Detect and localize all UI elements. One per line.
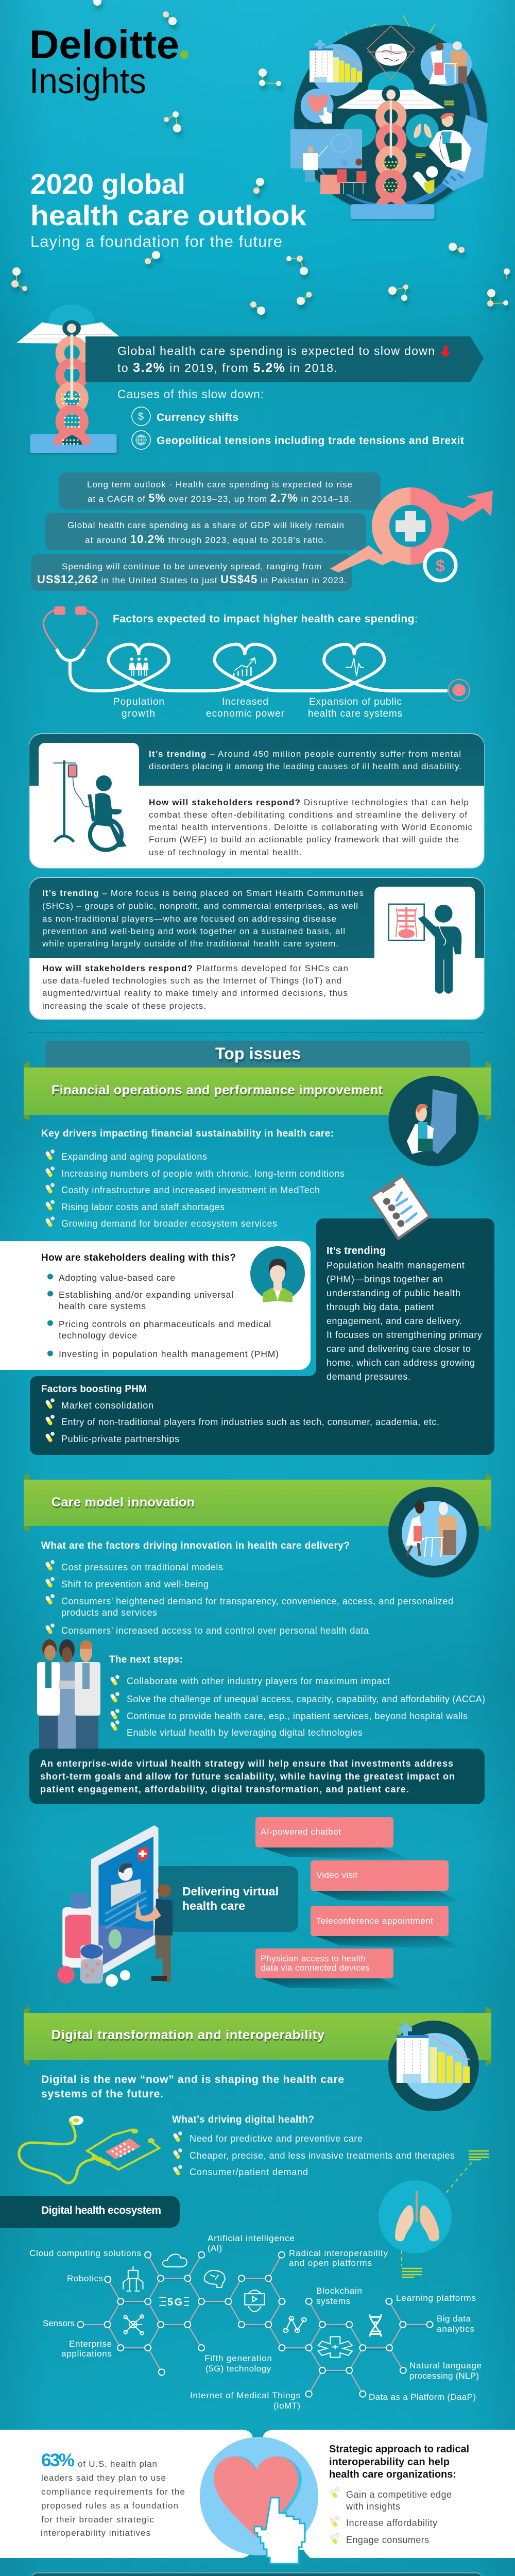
icon: pulse: [346, 658, 364, 676]
list: key drivers: Growing demand for broader ecosystem services: [61, 1218, 277, 1229]
outlook box 3: US$12,262 in the United States to just US$45 in Pakistan in 2023.: [37, 573, 347, 586]
outlook box 2: at around 10.2% through 2023, equal to 2018's ratio.: [85, 533, 326, 546]
outlook box 3: Spending will continue to be unevenly spread, ranging from: [62, 562, 321, 571]
icon: heart with pointer hand: [200, 2437, 318, 2564]
list: factors driving innovation: Consumers’ increased access to and control over personal health data: [61, 1625, 369, 1636]
network diagram: digital health ecosystem: Natural language: [409, 2361, 482, 2370]
logo: Deloitte Insights: [29, 22, 188, 101]
label: digital health ecosystem: Digital health ecosystem: [41, 2205, 161, 2216]
list: strategic approach: Engage consumers: [346, 2535, 429, 2545]
box: AI-powered chatbot: AI-powered chatbot: [261, 1827, 341, 1837]
callout: virtual health strategy: short-term goals and allow for future scalability, while having the greatest impact on: [40, 1771, 455, 1782]
network diagram: digital health ecosystem: Blockchain: [316, 2286, 362, 2296]
network diagram: digital health ecosystem: processing (NLP): [409, 2371, 479, 2381]
outlook box 2: Global health care spending as a share of GDP will likely remain: [67, 520, 344, 530]
panel: smart health communities trend: augmented/virtual reality to make timely and informed decisions, thus: [42, 988, 348, 998]
icon: caregiver with walker badge: [388, 1487, 479, 1578]
icon: medical star: [318, 2337, 352, 2358]
panel: mental health trend: mental health interventions. Deloitte is collaborating with World Economic: [149, 822, 473, 832]
icon: DNA: [370, 2314, 381, 2337]
text: PHM trending: engagement, and care delivery.: [327, 1316, 462, 1326]
icon: stakeholder avatar: [250, 1246, 305, 1302]
panel: smart health communities trend: (SHCs) – groups of public, nonprofit, and commercial enterprises, as well: [42, 901, 358, 911]
icon: wheelchair patient with IV: [53, 760, 127, 850]
stat: 63 percent: 63%: [41, 2450, 75, 2470]
logo: Deloitte Insights: Insights: [29, 61, 146, 101]
heading: digital is the new now: Digital is the new “now” and is shaping the health care: [41, 2074, 344, 2086]
factor labels: Increased: [222, 697, 268, 707]
panel: mental health trend: [29, 734, 484, 868]
list: strategic approach: interoperability can help: [329, 2456, 450, 2468]
ribbon: financial operations: Financial operations and performance improvement: [52, 1083, 383, 1097]
illustration: pills: [57, 1959, 167, 1987]
text: PHM trending: understanding of public health: [327, 1288, 460, 1298]
panel: PHM dark backdrop: [30, 1218, 494, 1455]
icon: clipboard: [371, 1176, 430, 1239]
panel: smart health communities trend: while operating largely outside of the traditional health care system.: [42, 939, 338, 948]
box: AI-powered chatbot: [255, 1817, 412, 1860]
network diagram: digital health ecosystem: Data as a Platform (DaaP): [369, 2392, 476, 2402]
network diagram: digital health ecosystem: systems: [316, 2296, 350, 2306]
icon: robot: [123, 2266, 143, 2291]
panel: smart health communities trend: It’s trending – More focus is being placed on Smart Health Communities: [42, 888, 364, 898]
list: what's driving digital health: [172, 2114, 455, 2177]
ribbon: digital transformation: [24, 2006, 491, 2066]
panel: smart health communities trend: increasing the scale of these projects.: [42, 1001, 206, 1011]
box: physician access: Physician access to health: [261, 1954, 366, 1963]
factors heading: Factors expected to impact higher health care spending:: [113, 613, 418, 625]
presentation board: [290, 129, 366, 194]
panel: mental health trend: combat these often-debilitating conditions and streamline the delivery of: [149, 810, 467, 820]
outlook box 3: [31, 554, 352, 591]
icon: brain: [204, 2270, 225, 2287]
wings: [337, 86, 445, 110]
illustration: three doctors: [37, 1639, 103, 1754]
list: factors boosting PHM: Market consolidation: [61, 1400, 153, 1411]
list: key drivers: [45, 1149, 345, 1229]
box: physician access: data via connected devices: [261, 1963, 370, 1973]
list: strategic approach: Increase affordability: [346, 2518, 437, 2528]
callout: virtual health strategy: An enterprise-wide virtual health strategy will help ensure that investments address: [40, 1758, 453, 1769]
stat: 63 percent: of U.S. health plan: [78, 2459, 157, 2469]
logo: Deloitte Insights: Deloitte: [29, 22, 179, 67]
network diagram: digital health ecosystem: Radical interoperability: [289, 2248, 388, 2258]
icon: rising cost symbol: $: [436, 556, 445, 575]
hero illustration: health care collage: [290, 25, 488, 219]
factor labels: health care systems: [308, 708, 402, 719]
stat: 63 percent: [41, 2450, 185, 2538]
outlook box 2: [45, 513, 366, 550]
stethoscope with heart loops: [43, 606, 470, 701]
list: strategic approach: health care organizations:: [329, 2469, 456, 2480]
panel: mental health trend: It’s trending – Around 450 million people currently suffer from mental: [149, 749, 461, 759]
cause: currency shifts: $: [138, 411, 144, 422]
heading: digital is the new now: [41, 2074, 344, 2100]
text: PHM trending: It focuses on strengthening primary: [327, 1330, 482, 1340]
list: strategic approach: Strategic approach to radical: [329, 2444, 469, 2455]
ribbon: digital transformation: Digital transformation and interoperability: [52, 2028, 324, 2042]
stat: 63 percent: proposed rules as a foundation: [41, 2501, 178, 2511]
panel: smart health communities trend: as non-traditional players—who are focused on addressing disease: [42, 914, 336, 924]
network diagram: digital health ecosystem: Enterprise: [69, 2339, 112, 2349]
factor labels: Expansion of public: [309, 697, 402, 707]
cause: currency shifts: Currency shifts: [157, 412, 238, 423]
icon: doctor with tablet badge: [388, 1076, 479, 1166]
text: PHM trending: care and delivering care closer to: [327, 1344, 471, 1354]
cause: geopolitical tensions: Geopolitical tensions including trade tensions and Brexit: [157, 435, 464, 447]
network diagram: digital health ecosystem: Cloud computing solutions: [29, 2248, 141, 2258]
panel: stakeholders: [0, 1241, 311, 1370]
panel: stakeholders: health care systems: [59, 1301, 146, 1311]
box: teleconference appointment: Teleconference appointment: [316, 1916, 433, 1926]
list: strategic approach: Gain a competitive edge: [346, 2489, 452, 2500]
network diagram: digital health ecosystem: Sensors: [43, 2318, 75, 2328]
text: PHM trending: through big data, patient: [327, 1302, 434, 1312]
factors driving innovation heading: What are the factors driving innovation in health care delivery?: [41, 1540, 350, 1551]
box: video visit: Video visit: [316, 1870, 357, 1880]
arrow banner: spending slowdown: to 3.2% in 2019, from 5.2% in 2018.: [117, 361, 337, 375]
list: next steps: [110, 1675, 485, 1738]
list: factors boosting PHM: Entry of non-traditional players from industries such as tech, consumer, academia, etc.: [61, 1417, 439, 1427]
list: key drivers: Expanding and aging populations: [61, 1151, 207, 1162]
list: factors boosting PHM: Public-private partnerships: [61, 1434, 179, 1444]
arrow banner: spending slowdown: [85, 336, 484, 382]
illustration: tablet with doctor: [62, 1825, 173, 1982]
hospital and bar chart: [310, 40, 363, 96]
network diagram: digital health ecosystem: Internet of Medical Things: [190, 2391, 300, 2400]
network diagram: digital health ecosystem: Robotics: [67, 2274, 103, 2283]
label: digital health ecosystem: [0, 2196, 180, 2228]
text: PHM trending: (PHM)—brings together an: [327, 1274, 443, 1284]
ribbon: care model innovation: Care model innovation: [52, 1495, 195, 1510]
text: PHM trending: demand pressures.: [327, 1371, 410, 1382]
network diagram: digital health ecosystem: Fifth generation: [204, 2353, 272, 2363]
key drivers heading: Key drivers impacting financial sustainability in health care:: [41, 1128, 334, 1139]
panel: mental health trend: disorders placing it among the leading causes of ill health and disability.: [149, 761, 461, 771]
list: factors driving innovation: products and services: [61, 1607, 157, 1618]
box: delivering virtual health care: health care: [182, 1899, 245, 1912]
list: what's driving digital health: Consumer/patient demand: [190, 2167, 308, 2177]
network diagram: digital health ecosystem: 5G: [167, 2297, 182, 2308]
panel: stakeholders: technology device: [59, 1330, 137, 1341]
DNA helix: [380, 105, 403, 209]
text: PHM trending: home, which can address growing: [327, 1358, 475, 1368]
cause: geopolitical tensions: [132, 431, 464, 449]
panel: data management trend: [30, 2573, 484, 2576]
text: PHM trending: Population health management: [327, 1260, 465, 1270]
panel: smart health communities trend: [29, 877, 484, 1020]
network diagram: digital health ecosystem: [29, 2233, 482, 2411]
brain: [367, 26, 415, 80]
list: next steps: Collaborate with other industry players for maximum impact: [127, 1676, 390, 1686]
box: video visit: [311, 1860, 464, 1903]
icon: rising cost symbol: [330, 490, 493, 581]
panel: smart health communities trend: How will stakeholders respond? Platforms developed for SHCs can: [42, 963, 348, 973]
title: 2020 global: [30, 168, 185, 200]
box: delivering virtual health care: [149, 1866, 298, 1932]
icon: cloud: [163, 2254, 187, 2267]
panel: stakeholders: Establishing and/or expanding universal: [59, 1290, 233, 1300]
list: factors driving innovation: Shift to prevention and well-being: [61, 1579, 209, 1589]
icon: network: [126, 2316, 142, 2333]
network diagram: digital health ecosystem: and open platforms: [289, 2258, 372, 2268]
top issues heading: [45, 1041, 470, 1067]
factor labels: Population: [113, 697, 164, 707]
heading: digital is the new now: systems of the future.: [41, 2088, 163, 2100]
panel: mental health trend: How will stakeholders respond? Disruptive technologies that can help: [149, 798, 469, 807]
network diagram: digital health ecosystem: analytics: [437, 2324, 474, 2334]
top issues heading: Top issues: [215, 1044, 301, 1063]
illustration: lungs callout: [379, 2151, 489, 2277]
text: PHM trending: [327, 1245, 482, 1382]
caduceus illustration: [16, 304, 128, 453]
icon: doctor with x-ray: [389, 904, 461, 994]
panel: smart health communities trend: prevention and well-being and work together on a sustained basis, all: [42, 926, 345, 936]
list: next steps: Enable virtual health by leveraging digital technologies: [127, 1727, 363, 1738]
next steps heading: The next steps:: [109, 1654, 183, 1665]
network diagram: digital health ecosystem: Artificial intelligence: [208, 2233, 295, 2243]
icon: hospital and falling bars badge: [388, 2021, 479, 2111]
list: strategic approach: [329, 2444, 469, 2545]
list: what's driving digital health: Need for predictive and preventive care: [190, 2133, 363, 2144]
list: factors boosting PHM: Factors boosting PHM: [41, 1384, 147, 1395]
ribbon: care model innovation: [24, 1473, 491, 1533]
panel: mental health trend: Forum (WEF) to build an actionable policy framework that will guide the: [149, 835, 459, 844]
stat: 63 percent: compliance requirements for the: [41, 2487, 185, 2497]
factor labels: growth: [122, 708, 155, 719]
stat: 63 percent: leaders said they plan to use: [41, 2473, 166, 2483]
list: what's driving digital health: Cheaper, precise, and less invasive treatments and therapies: [190, 2150, 455, 2161]
list: what's driving digital health: What’s driving digital health?: [172, 2114, 314, 2125]
title: health care outlook: [30, 199, 306, 231]
lung and teal discs: [344, 114, 439, 147]
box: physician access: [255, 1948, 402, 1990]
network diagram: digital health ecosystem: Big data: [437, 2314, 471, 2324]
network diagram: digital health ecosystem: Learning platforms: [396, 2293, 476, 2303]
illustration: green stethoscope and blister pack: [19, 2116, 159, 2183]
callout: virtual health strategy: patient engagement, affordability, digital transformation, and patient care.: [40, 1784, 409, 1794]
list: key drivers: Costly infrastructure and increased investment in MedTech: [61, 1185, 320, 1195]
factor labels: economic power: [206, 708, 285, 719]
list: factors boosting PHM: [41, 1384, 439, 1444]
icon: 5G connectors: [159, 2297, 189, 2306]
cause: currency shifts: [132, 407, 238, 426]
box: teleconference appointment: [311, 1906, 464, 1948]
callout: virtual health strategy: [29, 1749, 485, 1804]
list: factors driving innovation: [45, 1560, 453, 1636]
list: key drivers: Rising labor costs and staff shortages: [61, 1202, 225, 1212]
panel: interoperability: [0, 2430, 515, 2564]
outlook box 1: [59, 472, 381, 510]
panel: stakeholders: Pricing controls on pharmaceuticals and medical: [59, 1319, 271, 1329]
icon: population: [128, 657, 148, 676]
arrow banner: spending slowdown: Global health care spending is expected to slow down: [117, 344, 435, 358]
panel: mental health trend: use of technology in mental health.: [149, 848, 302, 857]
list: next steps: Solve the challenge of unequal access, capacity, capability, and affordability (ACCA): [127, 1694, 485, 1704]
subtitle: Laying a foundation for the future: [30, 232, 282, 250]
list: next steps: Continue to provide health care, esp., inpatient services, beyond hospital walls: [127, 1711, 468, 1721]
causes heading: Causes of this slow down:: [117, 387, 264, 401]
list: factors driving innovation: Consumers’ heightened demand for transparency, convenience, access, and personalized: [61, 1596, 453, 1606]
list: strategic approach: with insights: [346, 2501, 400, 2512]
platform: [351, 204, 434, 219]
capsule: [413, 166, 438, 194]
decorative molecules: [11, 0, 510, 315]
doctor and patient with walker: [421, 41, 472, 86]
ribbon: financial operations: [24, 1061, 491, 1122]
icon: VR headset: [245, 2290, 265, 2312]
network diagram: digital health ecosystem: (AI): [208, 2243, 222, 2253]
stat: 63 percent: for their broader strategic: [41, 2515, 154, 2524]
network diagram: digital health ecosystem: (5G) technology: [205, 2364, 271, 2374]
title: [30, 168, 306, 231]
factor labels: [113, 697, 402, 719]
text: PHM trending: It’s trending: [327, 1245, 386, 1257]
icon: data graph: [286, 2318, 304, 2330]
list: key drivers: Increasing numbers of people with chronic, long-term conditions: [61, 1168, 345, 1179]
list: factors driving innovation: Cost pressures on traditional models: [61, 1562, 223, 1572]
panel: smart health communities trend: use data-fueled technologies such as the Internet of Things (IoT) and: [42, 976, 341, 986]
doctor with tablet: [429, 113, 488, 191]
stat: 63 percent: interoperability initiatives: [41, 2528, 150, 2538]
heart and hand: [301, 89, 334, 124]
panel: stakeholders: Investing in population health management (PHM): [59, 1349, 279, 1359]
icon: growth chart: [234, 658, 255, 676]
outlook box 1: at a CAGR of 5% over 2019–23, up from 2.7% in 2014–18.: [88, 492, 352, 504]
panel: stakeholders: Adopting value-based care: [59, 1273, 175, 1283]
outlook box 1: Long term outlook - Health care spending is expected to rise: [87, 480, 352, 489]
network diagram: digital health ecosystem: applications: [61, 2349, 112, 2359]
box: delivering virtual health care: Delivering virtual: [182, 1885, 279, 1898]
panel: stakeholders: How are stakeholders dealing with this?: [41, 1252, 236, 1263]
network diagram: digital health ecosystem: (IoMT): [273, 2401, 300, 2411]
